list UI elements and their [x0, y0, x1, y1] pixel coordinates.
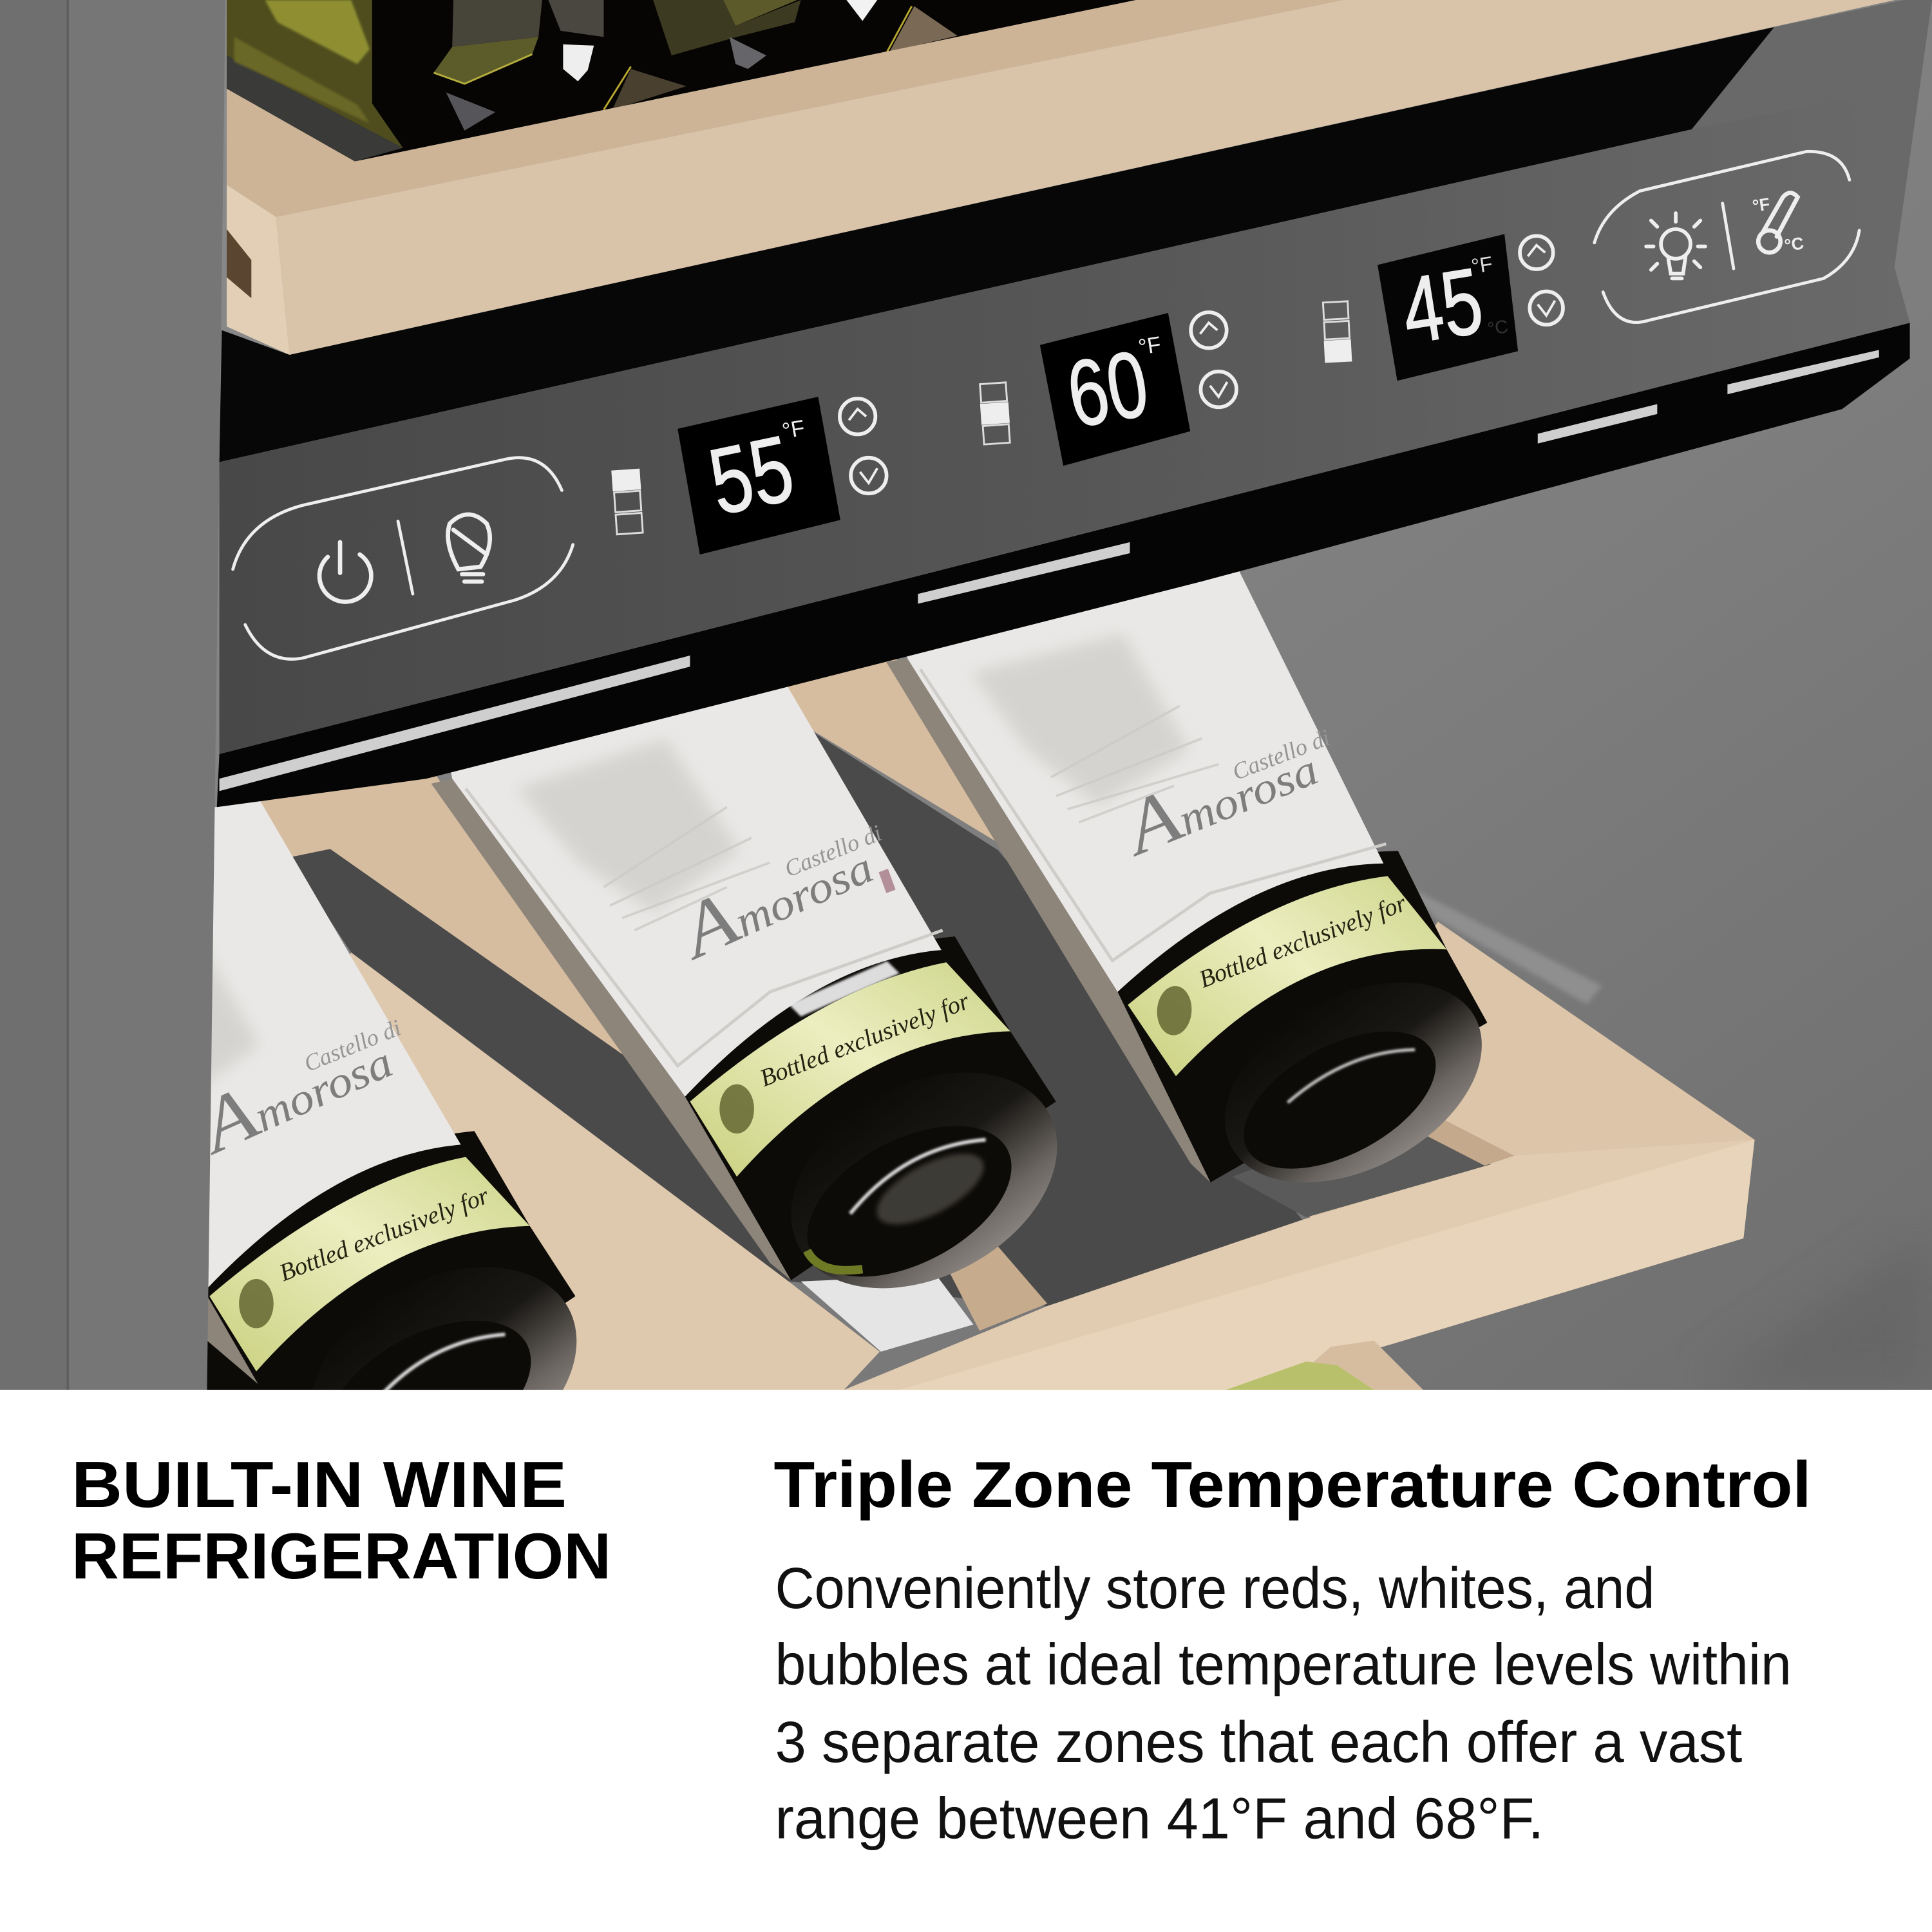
- right touch pill: [1595, 151, 1859, 323]
- upper wooden shelf: [227, 0, 1895, 355]
- buttons zone 2: [1191, 312, 1236, 407]
- shelf window right: [1232, 1115, 1491, 1217]
- display 45: °C: [1486, 316, 1510, 339]
- bottle: right: Bottled exclusively for: [1195, 889, 1410, 993]
- display 55: [677, 397, 840, 554]
- product category heading: REFRIGERATION: [71, 1520, 611, 1593]
- rack bar between bottles: [764, 653, 1010, 850]
- control panel: °C: [1783, 233, 1805, 255]
- panel lower trim: [217, 323, 1910, 807]
- display 60: 60: [1059, 330, 1155, 447]
- display 45: [1378, 234, 1518, 381]
- icon: power: [319, 542, 371, 601]
- rear wall shading: [1797, 1283, 1911, 1369]
- bottle: middle: Castello di: [781, 820, 885, 882]
- zone indicator 3: [1321, 301, 1352, 363]
- product category heading: BUILT-IN WINE: [71, 1448, 567, 1521]
- feature description: Conveniently store reds, whites, and: [775, 1557, 1655, 1621]
- left side wall: [0, 0, 225, 1390]
- bottle: right: Castello di: [1229, 724, 1333, 785]
- left touch pill: [233, 458, 573, 659]
- bottle: left: Amorosa: [184, 1010, 402, 1171]
- icon: bulb off: [448, 515, 490, 582]
- icon: bulb on: [1646, 213, 1705, 278]
- rack bar upper left: [250, 770, 625, 1056]
- bottle: right: [849, 482, 1555, 1240]
- display 45: °F: [1470, 252, 1494, 278]
- bottle: left: Castello di: [300, 1014, 404, 1077]
- bottle: right: Amorosa: [1108, 718, 1327, 873]
- icon: thermometer: [1758, 193, 1797, 252]
- feature description: range between 41°F and 68°F.: [775, 1787, 1544, 1852]
- buttons zone 1: [840, 399, 887, 493]
- display 55: °F: [781, 416, 806, 444]
- bottle: left: Bottled exclusively for: [276, 1182, 493, 1287]
- product category heading: [71, 1448, 611, 1593]
- zone indicator 2: [979, 383, 1011, 444]
- zone indicator 1: [611, 469, 644, 535]
- caption panel: [0, 1390, 1932, 1932]
- glass right extension: [1692, 0, 1932, 267]
- buttons zone 3: [1520, 236, 1563, 325]
- product photo: [0, 0, 1932, 1526]
- panel glass face: [220, 99, 1910, 754]
- display 60: [1040, 313, 1190, 466]
- bottle: middle: Bottled exclusively for: [756, 987, 973, 1092]
- control panel: [217, 99, 1910, 807]
- lower wooden shelf: [209, 885, 1754, 1390]
- display 55: 55: [701, 415, 802, 535]
- black housing behind control panel: [220, 27, 1774, 462]
- panel trim highlights: [220, 350, 1879, 791]
- bottle: middle: Amorosa: [664, 816, 883, 976]
- display 45: 45: [1395, 247, 1490, 363]
- feature description: 3 separate zones that each offer a vast: [775, 1710, 1742, 1775]
- display 60: °F: [1137, 332, 1162, 360]
- feature description: [775, 1557, 1792, 1852]
- feature description: bubbles at ideal temperature levels within: [775, 1633, 1792, 1697]
- bottle: middle: [431, 604, 1094, 1332]
- upper wine bottles: [227, 0, 1136, 162]
- left bottle shadow corner: [207, 1341, 265, 1390]
- bottle: left: [0, 799, 614, 1526]
- control panel: °F: [1751, 194, 1771, 216]
- lower shelf dark interior: [289, 708, 1302, 1306]
- feature title: Triple Zone Temperature Control: [774, 1448, 1811, 1521]
